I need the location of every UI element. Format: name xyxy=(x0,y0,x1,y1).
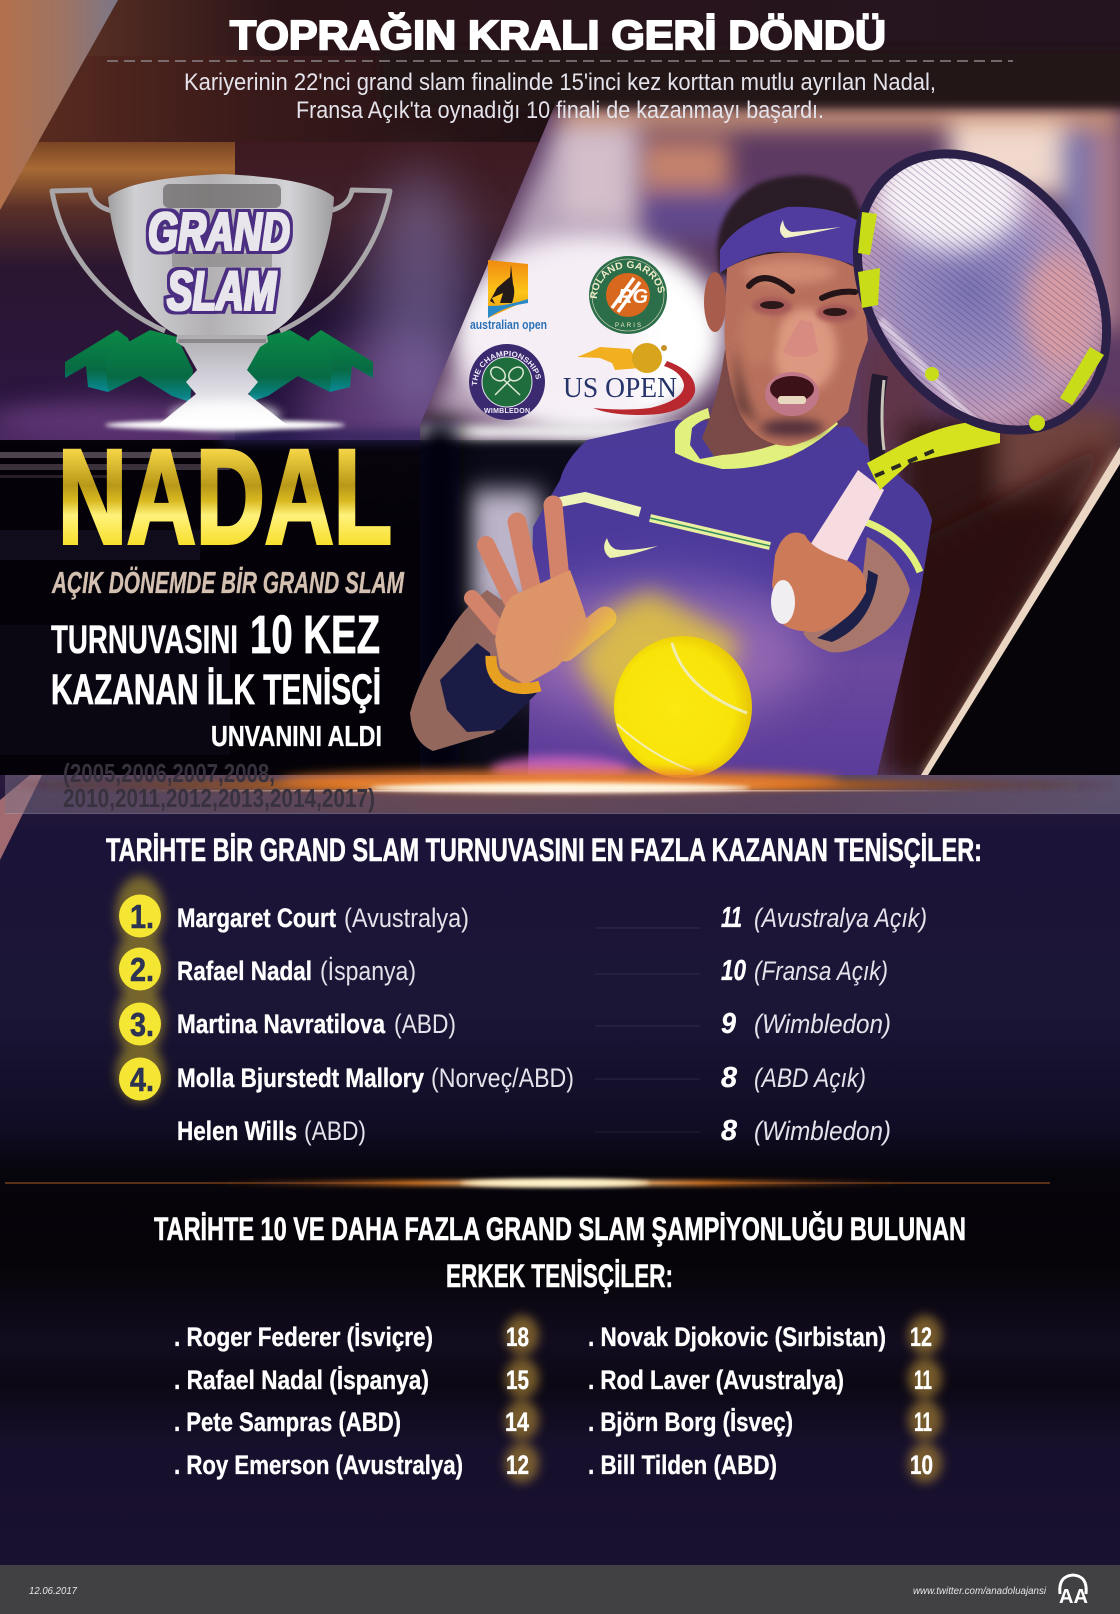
dark fade under subtitle xyxy=(380,50,1120,108)
list: right column xyxy=(588,1322,933,1480)
glowing divider xyxy=(5,1179,1050,1187)
illustration: Rafael Nadal xyxy=(410,106,1120,784)
list: right column: . Rod Laver (Avustralya) xyxy=(588,1365,844,1395)
face xyxy=(725,253,868,446)
racket accents xyxy=(858,212,1104,431)
list: left column: . Pete Sampras (ABD) xyxy=(174,1407,401,1437)
years won xyxy=(63,758,375,813)
shirt stripe xyxy=(560,497,920,572)
orange wrist strap xyxy=(491,656,540,689)
row: Molla Bjurstedt Mallory: 8 xyxy=(721,1062,738,1094)
face shading xyxy=(735,260,856,437)
logo: wimbledon: WIMBLEDON xyxy=(484,408,530,415)
record statement: 10 KEZ xyxy=(250,605,380,665)
row: Helen Wills xyxy=(177,1115,891,1147)
list: right column: . Novak Djokovic (Sırbistan) xyxy=(588,1322,886,1352)
subtitle xyxy=(184,69,936,124)
shirt glow xyxy=(510,580,810,720)
handles xyxy=(52,190,390,331)
row: Margaret Court: (Avustralya Açık) xyxy=(754,903,927,933)
list: left column: . Rafael Nadal (İspanya) xyxy=(174,1365,429,1395)
list: left column: 12 xyxy=(506,1450,529,1480)
row: Helen Wills: Helen Wills xyxy=(177,1116,297,1146)
list: left column xyxy=(174,1322,529,1480)
title block: NADAL: NADAL xyxy=(58,423,392,572)
ear xyxy=(704,272,726,332)
record statement: TURNUVASINI xyxy=(51,618,238,662)
trophy label: GRAND xyxy=(148,202,290,262)
rank badges xyxy=(116,876,164,1102)
record statement: UNVANINI ALDI xyxy=(211,721,382,753)
left hand xyxy=(472,505,605,685)
heading: 10+ slam men: ERKEK TENİSÇİLER: xyxy=(446,1258,673,1294)
row: Rafael Nadal: (İspanya) xyxy=(320,955,416,986)
logo: roland garros: RG xyxy=(618,286,648,308)
row: Molla Bjurstedt Mallory: (Norveç/ABD) xyxy=(431,1063,574,1093)
trophy label: SLAM xyxy=(167,259,277,322)
rank badges: 3. xyxy=(130,1006,154,1043)
hair xyxy=(717,175,868,275)
subtitle: Fransa Açık'ta oynadığı 10 finali de kazanmayı başardı. xyxy=(296,97,824,124)
date: 12.06.2017 xyxy=(29,1586,77,1597)
row: Martina Navratilova: (ABD) xyxy=(394,1009,456,1039)
collar xyxy=(675,408,838,469)
rank badges: 2. xyxy=(130,951,154,988)
row: Helen Wills: 8 xyxy=(721,1115,738,1147)
row: Rafael Nadal: Rafael Nadal xyxy=(177,956,312,986)
list: right column: . Bill Tilden (ABD) xyxy=(588,1450,777,1480)
list: right column: 11 xyxy=(914,1365,932,1395)
racket handle xyxy=(803,470,884,565)
row: Margaret Court xyxy=(177,902,927,934)
row: Helen Wills: (Wimbledon) xyxy=(754,1116,891,1146)
trophy label xyxy=(148,202,290,322)
list: left column: . Roy Emerson (Avustralya) xyxy=(174,1450,463,1480)
number glows xyxy=(505,1315,942,1483)
source url: www.twitter.com/anadoluajansi xyxy=(913,1586,1047,1597)
left wristband xyxy=(440,643,537,732)
row: Margaret Court: 11 xyxy=(721,902,742,934)
years won: (2005,2006,2007,2008, xyxy=(63,758,275,788)
rank badges: 1. xyxy=(130,898,154,935)
headband xyxy=(720,207,862,273)
list: right column: . Björn Borg (İsveç) xyxy=(588,1407,793,1437)
racket shaft xyxy=(875,375,880,462)
row: Molla Bjurstedt Mallory xyxy=(177,1062,866,1094)
logo: australian open: australian open xyxy=(470,317,547,332)
bright diagonal edge right xyxy=(921,447,1120,775)
cup xyxy=(108,174,334,335)
AA logo: AA xyxy=(1059,1586,1088,1608)
stem xyxy=(158,335,287,425)
right forearm and hand xyxy=(771,532,910,652)
footer xyxy=(0,1565,1120,1614)
logo: roland garros: PARIS xyxy=(615,323,641,329)
logo: roland garros: ROLAND GARROS xyxy=(590,261,665,298)
mouth xyxy=(765,372,819,416)
trophy xyxy=(52,174,390,430)
heading: 10+ slam men xyxy=(154,1211,966,1294)
row: Margaret Court: (Avustralya) xyxy=(344,903,469,933)
list: left column: 14 xyxy=(505,1407,529,1437)
row: Helen Wills: (ABD) xyxy=(304,1116,366,1146)
left forearm xyxy=(410,590,537,751)
nose xyxy=(783,320,818,357)
headband logo xyxy=(780,220,841,238)
record statement xyxy=(51,565,405,753)
rank badges: 4. xyxy=(130,1061,154,1098)
row: Molla Bjurstedt Mallory: (ABD Açık) xyxy=(754,1063,866,1093)
years won: 2010,2011,2012,2013,2014,2017) xyxy=(63,783,375,813)
row: Molla Bjurstedt Mallory: Molla Bjurstedt Mallory xyxy=(177,1063,424,1093)
logo: us open xyxy=(563,343,695,415)
row: Rafael Nadal xyxy=(177,955,888,987)
record statement: AÇIK DÖNEMDE BİR GRAND SLAM xyxy=(51,565,405,600)
logo: wimbledon: THE CHAMPIONSHIPS xyxy=(472,350,541,386)
left diagonal light stripe xyxy=(0,775,42,860)
row: Rafael Nadal: (Fransa Açık) xyxy=(754,956,888,986)
ball trail xyxy=(575,590,740,760)
shirt xyxy=(528,420,932,775)
list: right column: 10 xyxy=(910,1450,933,1480)
record statement: KAZANAN İLK TENİSÇİ xyxy=(51,666,381,714)
photo backdrop: blurred arena xyxy=(420,100,1120,780)
list: right column: 11 xyxy=(914,1407,932,1437)
tournament logos xyxy=(469,256,696,420)
eyes xyxy=(760,301,847,316)
ribbons xyxy=(65,330,373,402)
list: right column: 12 xyxy=(910,1322,932,1352)
row: Martina Navratilova: Martina Navratilova xyxy=(177,1009,386,1039)
logo: wimbledon xyxy=(469,344,545,420)
row: Margaret Court: Margaret Court xyxy=(177,903,336,933)
AA logo xyxy=(1059,1575,1088,1608)
row: Martina Navratilova: (Wimbledon) xyxy=(754,1009,891,1039)
logo: us open: US OPEN xyxy=(563,372,677,404)
dashed divider xyxy=(107,60,1013,62)
list: left column: 15 xyxy=(506,1365,529,1395)
title: TOPRAĞIN KRALI GERİ DÖNDÜ xyxy=(230,12,886,58)
racket throat xyxy=(867,421,1000,490)
lens flare xyxy=(105,420,345,430)
list: left column: . Roger Federer (İsviçre) xyxy=(174,1322,433,1352)
subtitle: Kariyerinin 22'nci grand slam finalinde 15'inci kez korttan mutlu ayrılan Nadal, xyxy=(184,69,936,96)
eyebrows xyxy=(749,278,855,298)
row: Rafael Nadal: 10 xyxy=(721,955,746,987)
lower panel background xyxy=(0,775,1120,1565)
neck xyxy=(702,350,850,458)
row: Martina Navratilova: 9 xyxy=(721,1008,736,1040)
logo: roland garros xyxy=(589,256,667,334)
racket head xyxy=(852,149,1112,435)
row: Martina Navratilova xyxy=(177,1008,891,1040)
logo: australian open xyxy=(470,260,547,332)
shirt logo xyxy=(604,538,658,558)
list: left column: 18 xyxy=(506,1322,529,1352)
horizontal light band xyxy=(5,770,1120,814)
tennis ball xyxy=(614,636,752,778)
